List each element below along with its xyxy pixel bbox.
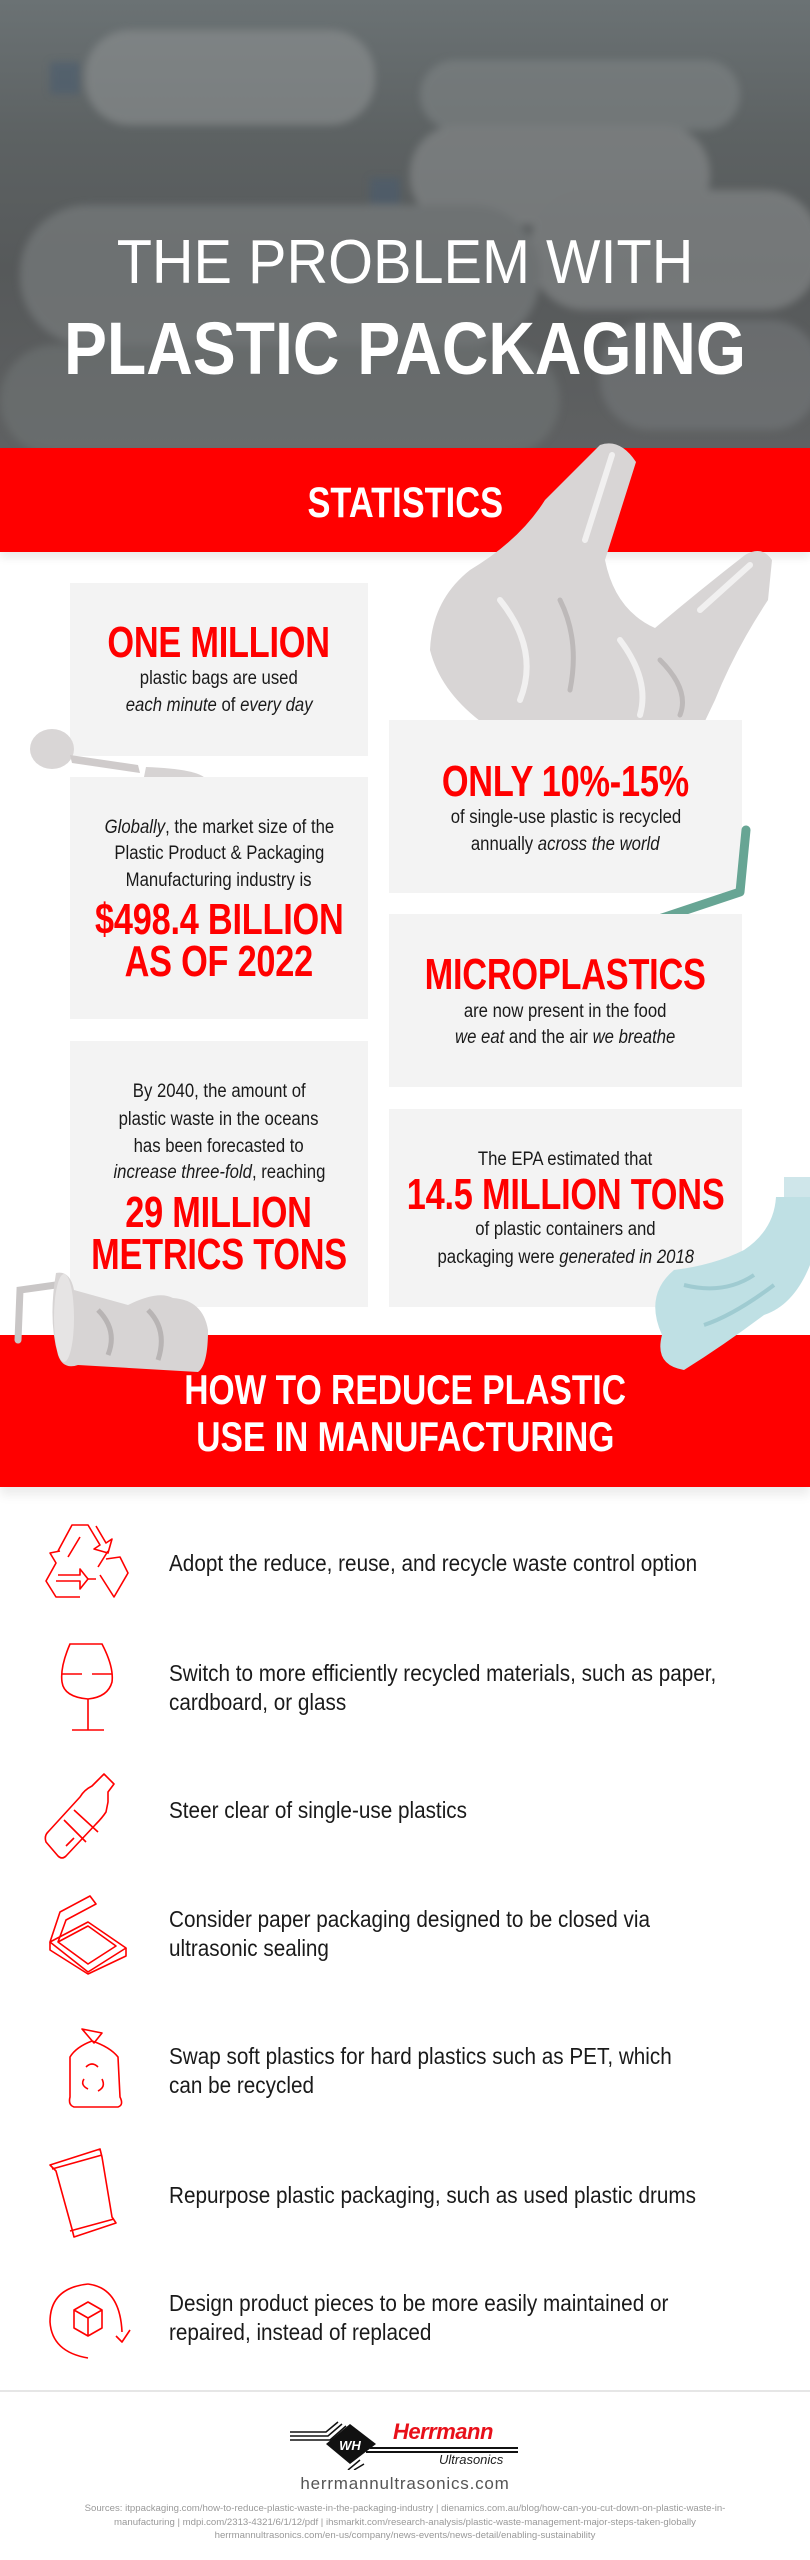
text: swap plastics: can be recycled <box>169 2072 314 2098</box>
icon: plastic bag <box>430 443 772 720</box>
panel: EPA estimate: The EPA estimated that <box>478 1149 653 1170</box>
red band: statistics heading: STATISTICS <box>307 478 503 526</box>
title: THE PROBLEM WITH <box>117 228 693 296</box>
icon: recycle arrows <box>45 1524 129 1598</box>
list item: paper box <box>49 1895 650 1975</box>
panel: recycled percentage: of single-use plastic is recycled <box>450 807 681 828</box>
icon: crushed blue bottle <box>655 1177 810 1370</box>
icon: wine glass <box>60 1643 114 1731</box>
panel: recycled percentage: ONLY 10%-15% <box>442 757 689 806</box>
text: sources: herrmannultrasonics.com/en-us/company/news-events/news-detail/enabling-sustainability <box>215 2530 595 2541</box>
panel: microplastics: we eat and the air we breathe <box>455 1027 676 1048</box>
text: switch materials: Switch to more efficiently recycled materials, such as paper, <box>169 1660 716 1686</box>
text: sources: manufacturing | mdpi.com/2313-4321/6/1/12/pdf | ihsmarkit.com/research-analysis/plastic-waste-management-major-steps-taken-globally <box>114 2516 696 2528</box>
title <box>64 228 746 390</box>
logo: Herrmann Ultrasonics: Herrmann <box>393 2419 493 2444</box>
panel: recycled percentage: annually across the world <box>471 834 660 855</box>
panel: market size <box>70 777 368 1019</box>
text: recycle option: Adopt the reduce, reuse, and recycle waste control option <box>169 1550 697 1576</box>
panel: one million: plastic bags are used <box>140 668 298 689</box>
panel: market size: Globally, the market size of the <box>104 817 334 838</box>
text: sources <box>85 2503 725 2541</box>
text: repurpose: Repurpose plastic packaging, such as used plastic drums <box>169 2182 696 2208</box>
panel: market size: Plastic Product & Packaging <box>114 843 324 864</box>
text: swap plastics <box>169 2043 672 2098</box>
panel: market size: $498.4 BILLION <box>95 895 343 944</box>
text: design for repair: repaired, instead of replaced <box>169 2319 431 2345</box>
panel: EPA estimate <box>389 1109 742 1307</box>
panel: one million: ONE MILLION <box>108 618 330 667</box>
icon: cycle box <box>49 2283 131 2359</box>
logo: Herrmann Ultrasonics <box>290 2419 518 2470</box>
panel: ocean waste forecast: METRICS TONS <box>91 1230 347 1279</box>
text: design for repair <box>169 2290 668 2345</box>
icon: crushed cup <box>14 1272 208 1372</box>
panel: ocean waste forecast: 29 MILLION <box>126 1188 312 1237</box>
panel: market size: Manufacturing industry is <box>126 870 312 891</box>
text: swap plastics: Swap soft plastics for hard plastics such as PET, which <box>169 2043 672 2069</box>
text: sources: Sources: itppackaging.com/how-to-reduce-plastic-waste-in-the-packaging-industry | dienamics.com.au/blog/how-can-you-cut-down-on-plastic-waste-in- <box>85 2503 725 2514</box>
red band: how to reduce heading <box>0 1335 810 1487</box>
panel: ocean waste forecast: By 2040, the amount of <box>133 1081 305 1102</box>
text: switch materials: cardboard, or glass <box>169 1689 346 1715</box>
icon: open box <box>49 1895 127 1975</box>
red band: how to reduce heading: USE IN MANUFACTURING <box>196 1413 614 1460</box>
logo: Herrmann Ultrasonics: Ultrasonics <box>439 2452 503 2467</box>
text: paper packaging <box>169 1906 650 1961</box>
icon: packaging drum <box>49 2148 117 2238</box>
list item: soft plastic bag <box>68 2028 672 2108</box>
panel: microplastics <box>389 914 742 1087</box>
panel: ocean waste forecast: increase three-fold, reaching <box>113 1162 325 1183</box>
panel: ocean waste forecast: has been forecasted to <box>134 1136 304 1157</box>
text: website url: herrmannultrasonics.com <box>300 2474 510 2493</box>
text: single-use: Steer clear of single-use plastics <box>169 1797 467 1823</box>
icon: spoon <box>30 729 204 777</box>
panel: EPA estimate: 14.5 MILLION TONS <box>407 1170 724 1219</box>
header photo background <box>0 0 810 448</box>
list item: glass <box>60 1643 716 1731</box>
icon: background bottles <box>0 30 810 455</box>
title: PLASTIC PACKAGING <box>64 306 746 390</box>
red band: how to reduce heading: HOW TO REDUCE PLASTIC <box>184 1366 626 1413</box>
panel: one million: each minute of every day <box>126 695 312 716</box>
panel: ocean waste forecast: plastic waste in the oceans <box>119 1109 319 1130</box>
list item: plastic drum <box>49 2148 696 2238</box>
logo: Herrmann Ultrasonics: WH <box>339 2438 361 2453</box>
text: paper packaging: Consider paper packaging designed to be closed via <box>169 1906 650 1932</box>
icon: recycle bag <box>68 2028 122 2108</box>
list item: repair <box>49 2283 668 2359</box>
icon: plastic bottle <box>44 1773 115 1859</box>
text: switch materials <box>169 1660 716 1715</box>
panel: microplastics: are now present in the food <box>464 1001 667 1022</box>
panel: microplastics: MICROPLASTICS <box>425 950 706 999</box>
icon: green straw <box>660 826 750 914</box>
panel: EPA estimate: of plastic containers and <box>475 1219 656 1240</box>
panel: ocean waste forecast <box>70 1041 368 1307</box>
text: paper packaging: ultrasonic sealing <box>169 1935 329 1961</box>
list item: recycle <box>45 1524 697 1598</box>
text: design for repair: Design product pieces to be more easily maintained or <box>169 2290 668 2316</box>
panel: market size: AS OF 2022 <box>125 937 313 986</box>
red band: statistics heading <box>0 448 810 552</box>
panel: one million <box>70 583 368 756</box>
panel: recycled percentage <box>389 720 742 893</box>
list item: bottle <box>44 1773 467 1859</box>
panel: EPA estimate: packaging were generated in 2018 <box>437 1247 694 1268</box>
